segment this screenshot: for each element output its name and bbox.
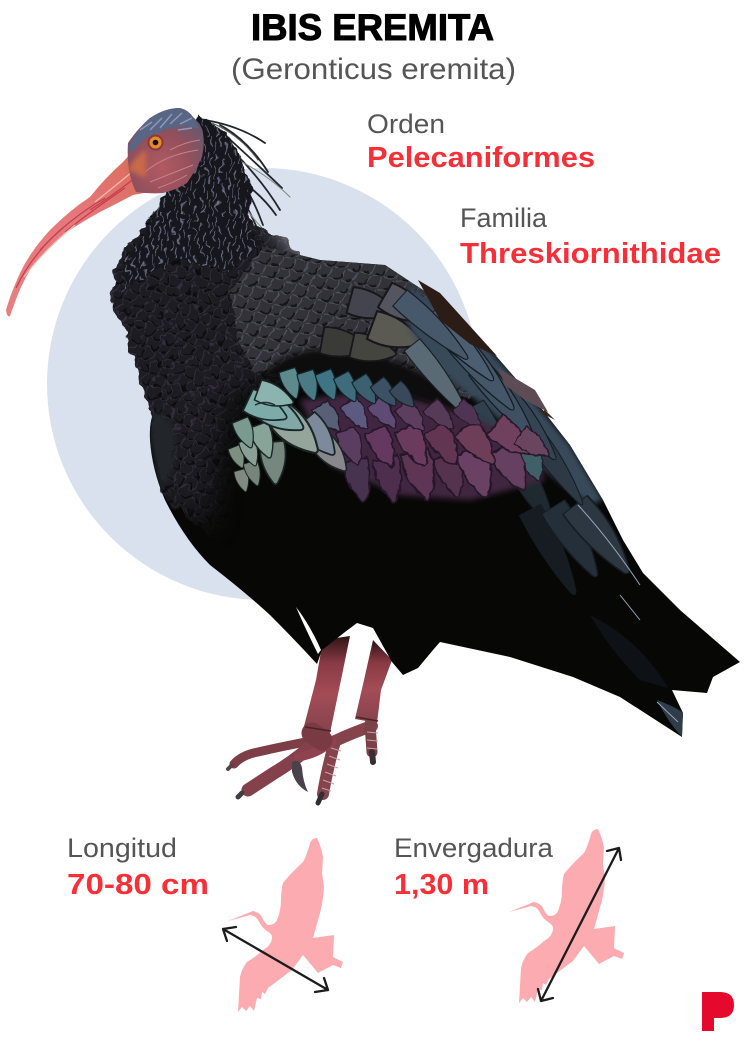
side lobe [150,410,175,490]
dark band above wing [263,346,430,384]
back feathers [230,246,500,400]
family label: Familia [460,203,548,233]
neck feathers [122,118,262,290]
neck base [150,115,262,260]
subtitle: (Geronticus eremita) [231,53,516,86]
grey shoulder feathers [319,282,419,362]
body [114,190,740,737]
order label [367,109,595,174]
blue band base [410,285,603,505]
tail sheen [657,700,683,737]
bird illustration [6,108,740,803]
wingspan stat: Envergadura [394,833,554,863]
family label: Threskiornithidae [460,238,721,270]
icon: wingspan silhouette with arrow [509,829,624,1003]
family label [460,203,721,270]
teal shoulder patch [228,380,355,493]
wingspan stat [394,833,554,901]
purple wing coverts [300,390,545,500]
title: IBIS EREMITA [251,7,494,48]
length stat: Longitud [67,833,177,863]
length stat [67,833,209,901]
teal feather row [278,366,414,408]
legs and feet [228,636,392,803]
order label: Orden [367,109,445,139]
blue upper-wing feathers [393,289,641,600]
head [128,108,204,193]
white gap between feathers [296,607,321,654]
eye [148,134,164,150]
background circle [47,168,479,600]
chest feathers [110,205,300,560]
wingspan stat: 1,30 m [394,869,489,901]
order label: Pelecaniformes [367,142,595,174]
icon: length silhouette with arrow [223,838,343,1012]
bill [6,150,160,316]
crest plumes [205,120,290,233]
rear feather tips [418,280,555,420]
length stat: 70-80 cm [67,869,209,901]
logo [702,992,734,1031]
plumage shading and feathers [150,246,683,737]
